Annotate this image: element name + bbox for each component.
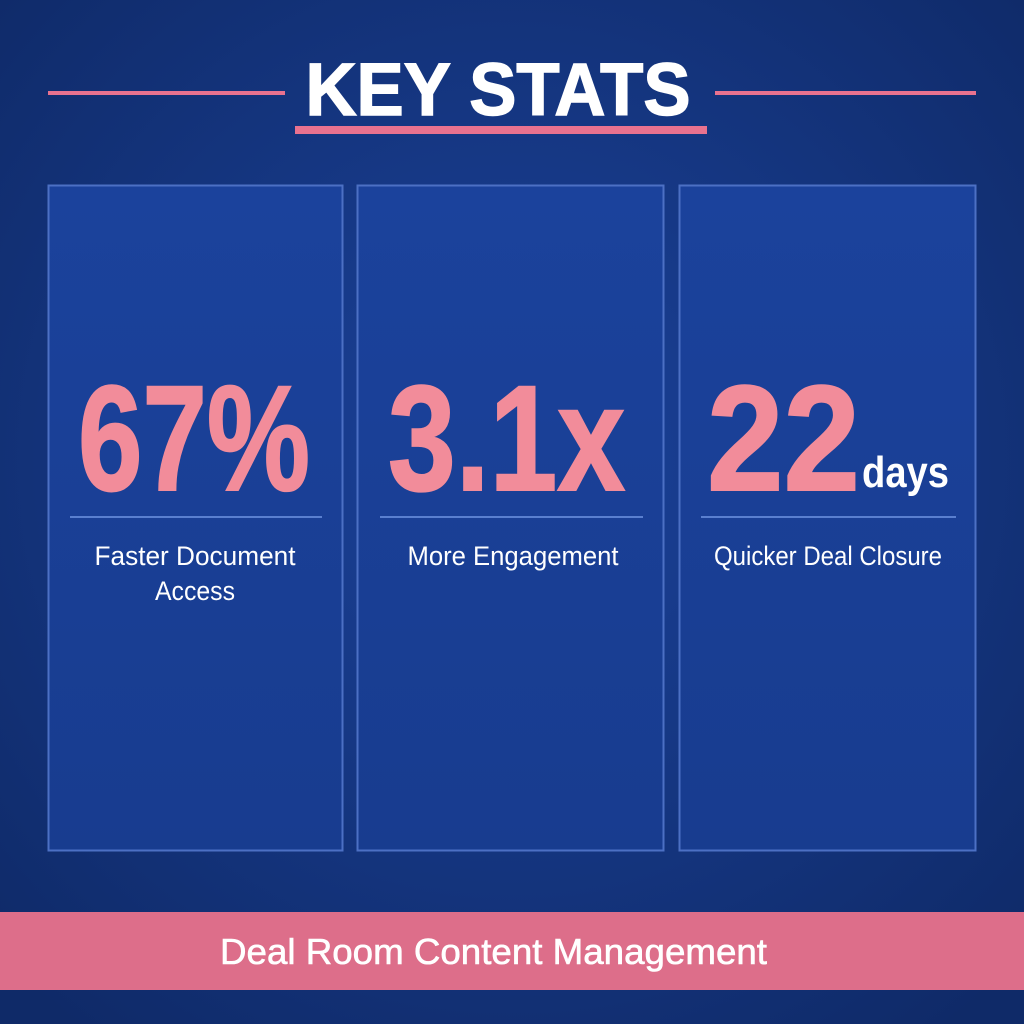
- title: KEY STATS: [306, 48, 690, 131]
- label: Quicker Deal Closure: [714, 541, 942, 571]
- panel: quicker deal closure: [680, 186, 976, 850]
- panel: faster document access: [48, 186, 342, 850]
- stat number 3.1x: 3.1x: [388, 354, 625, 522]
- stat number 67%: 67%: [78, 354, 310, 522]
- panel: more engagement: [358, 186, 664, 850]
- title: [48, 48, 976, 134]
- footer banner: [0, 912, 1024, 990]
- label: More Engagement: [408, 541, 619, 571]
- stat number 22 days: 22: [707, 354, 860, 522]
- panel: faster document access: Access: [155, 576, 235, 606]
- panel: quicker deal closure: days: [862, 448, 949, 497]
- label: Faster Document: [94, 541, 296, 571]
- footer banner: Deal Room Content Management: [220, 931, 767, 972]
